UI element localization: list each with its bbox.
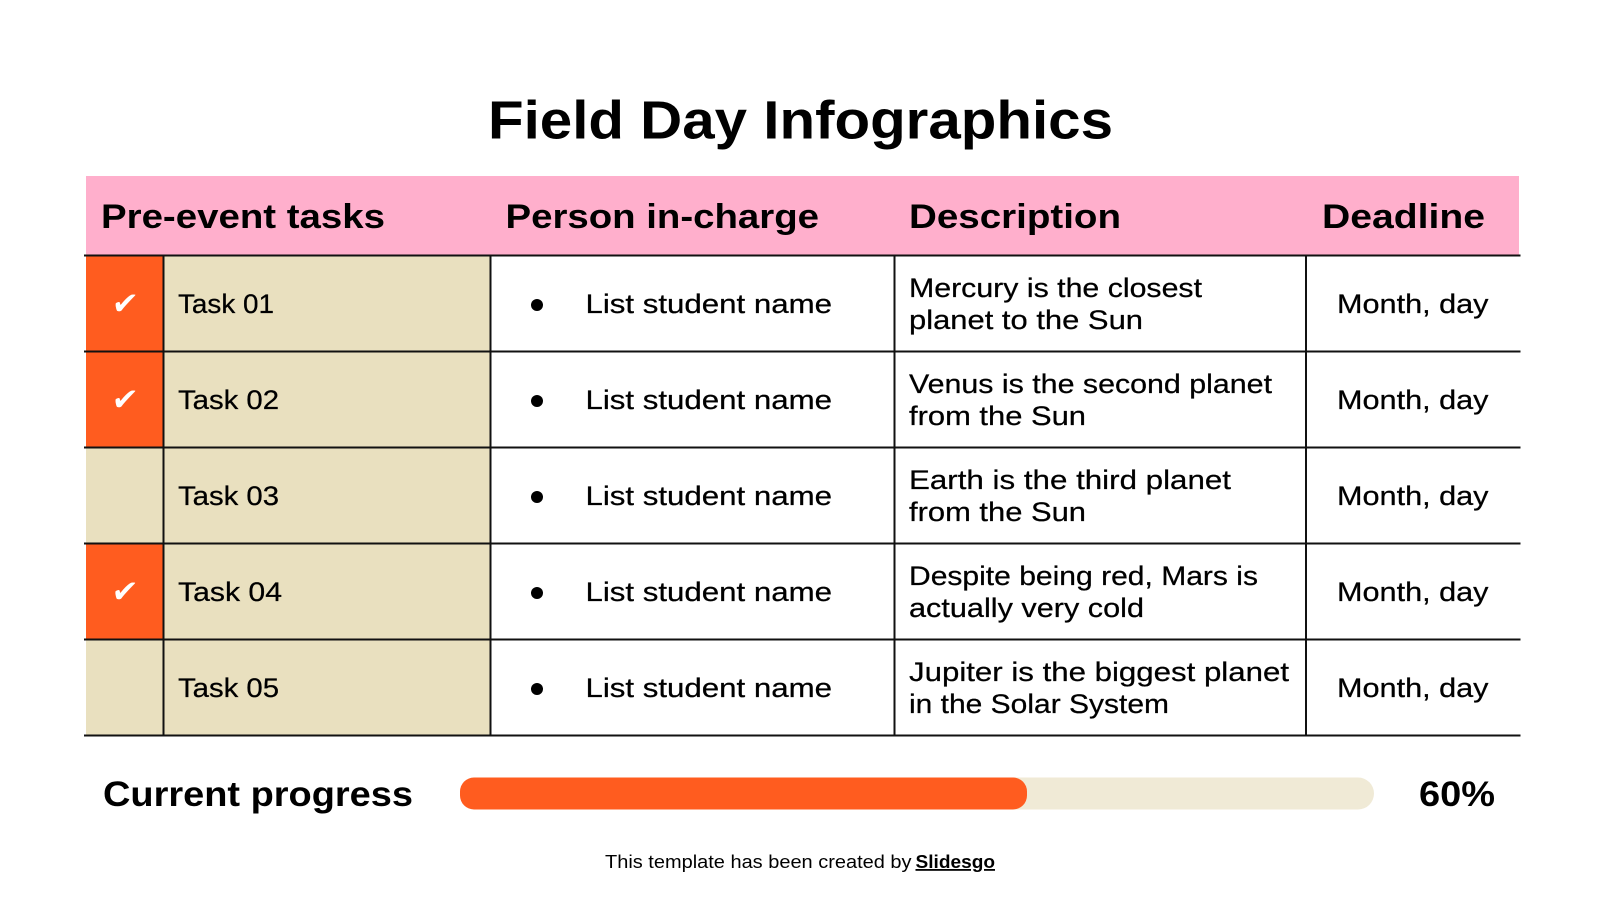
footer credit: This template has been created by: [605, 852, 912, 872]
heading: person in-charge: Person in-charge: [506, 198, 819, 236]
table header row: [86, 176, 1519, 255]
row: task 01: Mercury is the closest: [909, 273, 1203, 303]
status cell: task 04 done: [86, 543, 163, 639]
row: task 03: Task 03: [178, 481, 279, 511]
row: task 02: List student name: [586, 385, 832, 415]
progress value: 60%: [1419, 775, 1495, 814]
row: task 01: Task 01: [178, 289, 274, 319]
progress section: [103, 775, 1495, 814]
row: task 03: from the Sun: [909, 497, 1086, 527]
status cell: task 01 done: ✔: [110, 286, 140, 322]
panel: task table: [84, 176, 1520, 736]
row: task 03: List student name: [586, 481, 832, 511]
heading: deadline: Deadline: [1322, 198, 1485, 236]
row: task 02: Task 02: [178, 385, 279, 415]
title: Field Day Infographics: [488, 90, 1113, 150]
row: task 05: [178, 657, 1489, 719]
row: task 02: Venus is the second planet: [909, 369, 1273, 399]
row: task 05: List student name: [586, 673, 832, 703]
row: task 02: Month, day: [1337, 385, 1489, 415]
row: task 04: Task 04: [178, 577, 282, 607]
row: task 01: planet to the Sun: [909, 305, 1143, 335]
progress bar: [460, 778, 1374, 810]
row: task 03: Month, day: [1337, 481, 1489, 511]
row: task 01: [178, 273, 1489, 335]
row: task 01: List student name: [586, 289, 832, 319]
row: task 04: List student name: [586, 577, 832, 607]
row: task 05: Month, day: [1337, 673, 1489, 703]
row: task 05: Jupiter is the biggest planet: [909, 657, 1290, 687]
footer credit: Slidesgo: [916, 852, 995, 872]
row: task 03: Earth is the third planet: [909, 465, 1232, 495]
status cell: task 02 done: [86, 351, 163, 447]
heading: description: Description: [909, 198, 1121, 236]
status cell: task 01 done: [86, 255, 163, 351]
row: task 05: in the Solar System: [909, 689, 1169, 719]
row: task 04: Month, day: [1337, 577, 1489, 607]
row: task 04: [178, 561, 1489, 623]
row: task 04: Despite being red, Mars is: [909, 561, 1258, 591]
row: task 02: from the Sun: [909, 401, 1086, 431]
row: task 04: actually very cold: [909, 593, 1144, 623]
status cell: task 02 done: ✔: [110, 382, 140, 418]
status cell: task 04 done: ✔: [110, 574, 140, 610]
row: task 03: [178, 465, 1489, 527]
task column fills: [86, 255, 490, 735]
row: task 05: Task 05: [178, 673, 279, 703]
progress label: Current progress: [103, 775, 413, 814]
row: task 01: Month, day: [1337, 289, 1489, 319]
row: task 02: [178, 369, 1489, 431]
heading: pre-event tasks: Pre-event tasks: [101, 198, 385, 236]
